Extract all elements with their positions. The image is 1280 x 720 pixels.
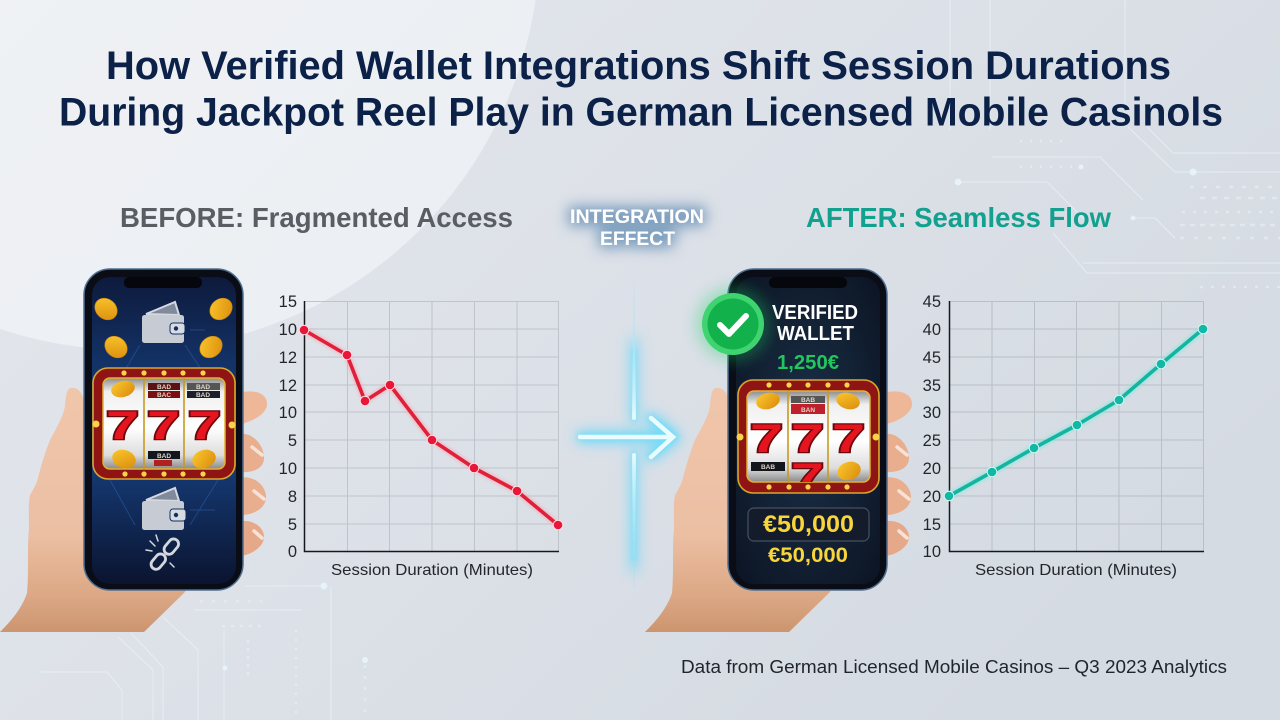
heading: before: BEFORE: Fragmented Access — [120, 202, 513, 233]
slot machine: before: 7 — [147, 404, 180, 448]
y axis labels: 8 — [288, 488, 297, 506]
y axis labels — [279, 293, 297, 561]
slot machine: after: BAB — [801, 397, 815, 404]
red line — [299, 325, 563, 530]
slot machine: before: BAD — [196, 384, 210, 391]
slot machine: before — [92, 368, 236, 479]
y axis labels: 20 — [923, 460, 941, 478]
phone body: before — [84, 269, 243, 590]
verified wallet text — [772, 301, 858, 345]
y axis labels: 10 — [279, 321, 297, 339]
y axis labels: 0 — [288, 543, 297, 561]
x axis label: Session Duration (Minutes) — [975, 562, 1177, 579]
slot machine: before: 7 — [188, 404, 221, 448]
verified wallet text: VERIFIED — [772, 301, 858, 324]
icon: broken chain — [146, 535, 181, 571]
verified wallet text: WALLET — [777, 322, 854, 345]
y axis labels: 30 — [923, 404, 941, 422]
slot machine: before: BAD — [196, 392, 210, 399]
y axis labels: 10 — [923, 543, 941, 561]
jackpot value: €50,000 — [768, 544, 848, 567]
before phone in hand — [0, 269, 267, 632]
grid — [949, 301, 1204, 551]
y axis labels: 5 — [288, 516, 297, 534]
slot machine: after — [736, 380, 880, 500]
y axis labels: 10 — [279, 460, 297, 478]
jackpot box — [748, 508, 869, 541]
y axis labels: 15 — [279, 293, 297, 311]
jackpot box: €50,000 — [763, 511, 854, 538]
title: During Jackpot Reel Play in German Licensed Mobile Casinols — [59, 90, 1223, 134]
y axis labels: 15 — [923, 516, 941, 534]
hand: before — [0, 388, 267, 632]
y axis labels: 25 — [923, 432, 941, 450]
phone screen: after — [736, 277, 880, 584]
y axis labels: 12 — [279, 377, 297, 395]
axes — [304, 301, 559, 552]
y axis labels: 12 — [279, 349, 297, 367]
slot machine: after: 7 — [750, 417, 783, 461]
slot machine: before: 7 — [106, 404, 139, 448]
divider and arrow — [580, 283, 674, 590]
y axis labels: 20 — [923, 488, 941, 506]
axes — [950, 301, 1204, 552]
heading: after: AFTER: Seamless Flow — [806, 202, 1111, 233]
teal line — [944, 324, 1208, 501]
slot machine: after: 7 — [791, 417, 824, 461]
y axis labels: 10 — [279, 404, 297, 422]
icon: wallet bottom — [142, 488, 186, 530]
title — [59, 44, 1223, 134]
after phone in hand — [645, 269, 912, 632]
source note: Data from German Licensed Mobile Casinos – Q3 2023 Analytics — [681, 657, 1227, 677]
slot machine: before: BAC — [157, 392, 171, 399]
integration effect label — [570, 206, 704, 250]
phone screen: before — [92, 277, 236, 584]
coins: top — [90, 294, 237, 362]
icon: wallet top — [142, 302, 185, 343]
integration effect label: EFFECT — [600, 228, 675, 250]
verified badge — [695, 286, 771, 362]
y axis labels: 5 — [288, 432, 297, 450]
y axis labels — [923, 293, 941, 561]
integration effect label: INTEGRATION — [570, 206, 704, 228]
y axis labels: 40 — [923, 321, 941, 339]
phone body: after — [728, 269, 887, 590]
wallet balance: 1,250€ — [777, 352, 839, 374]
hand: after — [645, 388, 912, 632]
slot machine: after: 7 — [791, 456, 824, 500]
y axis labels: 45 — [923, 293, 941, 311]
chart: before — [279, 293, 563, 579]
x axis label: Session Duration (Minutes) — [331, 562, 533, 579]
y axis labels: 45 — [923, 349, 941, 367]
title: How Verified Wallet Integrations Shift Session Durations — [106, 44, 1171, 88]
slot machine: before: BAD — [157, 384, 171, 391]
grid — [304, 301, 558, 551]
y axis labels: 35 — [923, 377, 941, 395]
slot machine: after: BAB — [761, 464, 775, 471]
slot machine: before: BAD — [157, 453, 171, 460]
slot machine: after: BAN — [801, 407, 815, 414]
slot machine: after: 7 — [832, 417, 865, 461]
chart: after — [923, 293, 1208, 579]
